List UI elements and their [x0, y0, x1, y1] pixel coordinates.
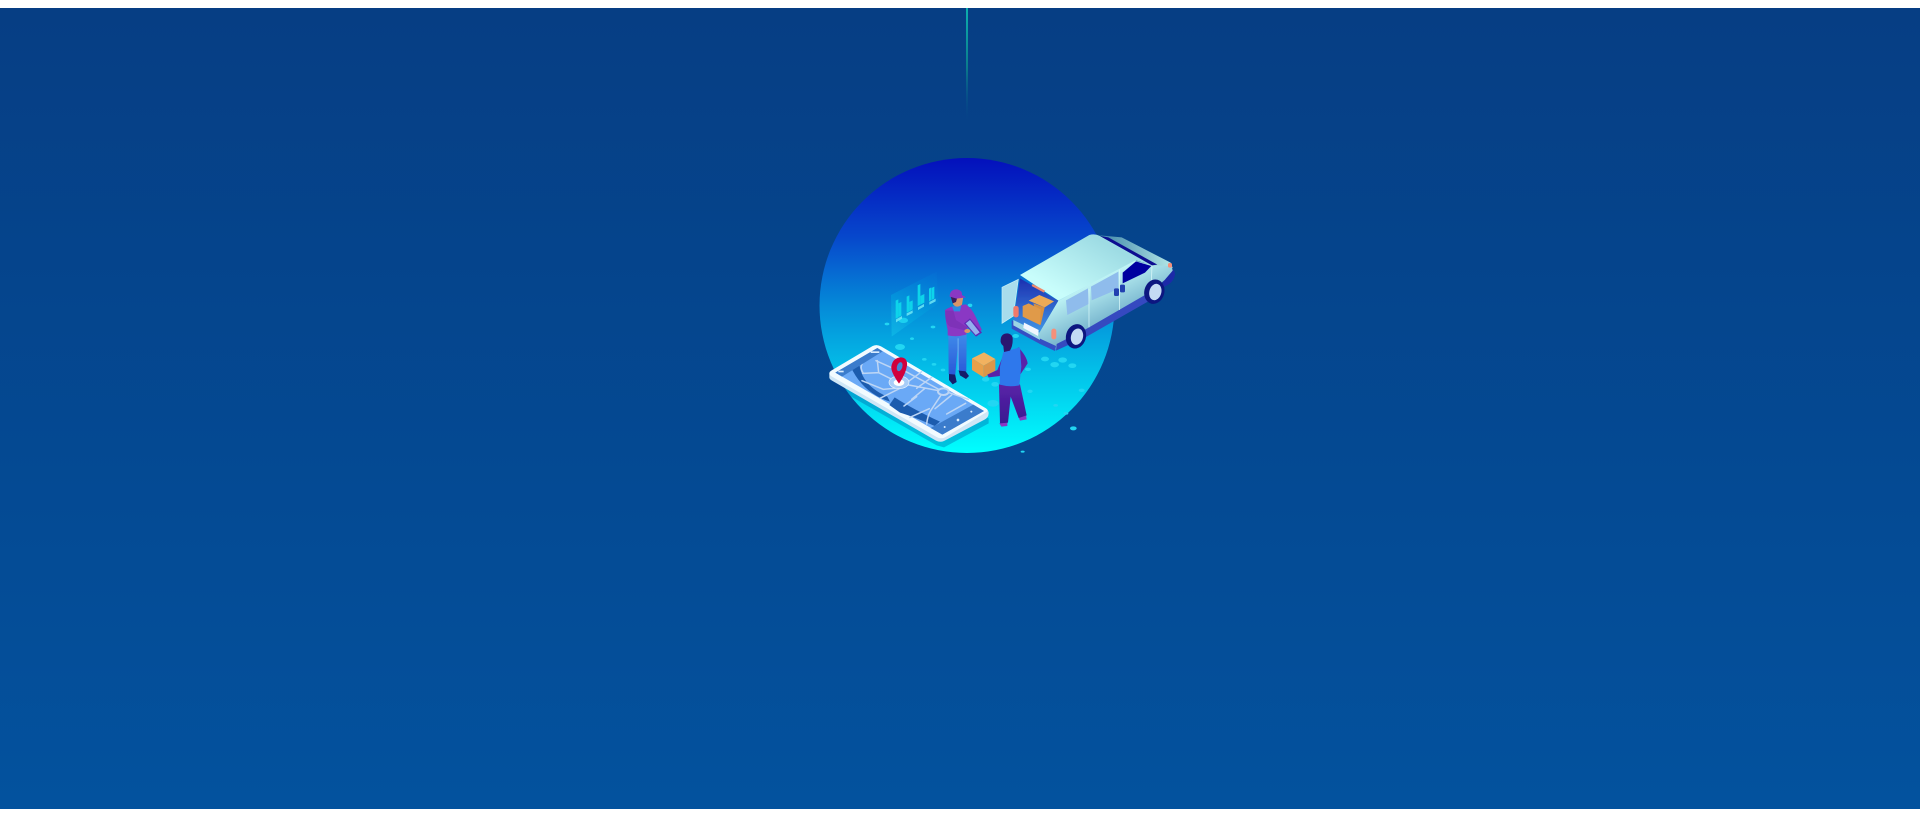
right arm [1013, 347, 1028, 374]
door seams [1089, 266, 1152, 327]
rear wheel [1063, 322, 1089, 351]
cab window [1123, 261, 1151, 283]
delivery van [1002, 234, 1175, 351]
jeans [948, 333, 967, 375]
head [1001, 333, 1013, 352]
rear side window [1066, 288, 1089, 315]
chart bars [896, 284, 934, 319]
pin base glow [889, 376, 909, 389]
cargo boxes [1023, 295, 1054, 325]
hood [1100, 235, 1173, 268]
shoes [999, 422, 1007, 427]
cargo opening [1013, 278, 1058, 333]
cap [950, 289, 966, 299]
floating bar chart [891, 272, 938, 337]
smartphone with map [829, 345, 989, 447]
map pin [889, 357, 909, 389]
river [851, 363, 890, 402]
rear panel under opening [1013, 320, 1040, 340]
open rear door [1002, 279, 1018, 323]
phone face [829, 345, 988, 438]
phone footer bar [931, 405, 984, 435]
lower sill [1056, 295, 1151, 351]
rear bumper [1012, 320, 1056, 351]
tablet [964, 318, 982, 337]
courier with tablet [945, 289, 982, 384]
trousers [999, 384, 1027, 423]
sweater [945, 304, 982, 336]
middle side window [1091, 272, 1118, 300]
phone footer icons [944, 411, 972, 428]
phone header bar [835, 348, 883, 377]
map screen [835, 348, 984, 435]
van roof [1020, 234, 1153, 301]
vest [1000, 347, 1021, 386]
licence plate [1023, 323, 1039, 336]
pin marker [891, 357, 907, 384]
roundabout [938, 388, 949, 395]
cardboard box [972, 352, 995, 377]
front navy bumper [1163, 269, 1175, 287]
phone body [829, 345, 989, 442]
brake lights [1013, 306, 1019, 317]
phone header icons [838, 351, 879, 372]
delivery scene [829, 234, 1175, 453]
head [951, 297, 963, 307]
phone shadow [829, 353, 989, 447]
hand [964, 329, 970, 333]
van side panel [1039, 261, 1173, 349]
collar [952, 305, 961, 311]
windshield strip [1100, 236, 1157, 265]
map roads [861, 361, 968, 424]
pin hole [896, 361, 904, 372]
front wheel [1141, 277, 1167, 306]
chart panel [891, 272, 938, 337]
gradient circle [820, 158, 1114, 453]
floor dots [885, 304, 1085, 453]
vertical connector line [966, 8, 968, 126]
door handles [1114, 288, 1119, 296]
left arm [987, 353, 1009, 377]
chart captions [896, 299, 936, 322]
customer holding box [987, 333, 1028, 427]
shoes [949, 374, 957, 384]
left sleeve [945, 311, 967, 331]
